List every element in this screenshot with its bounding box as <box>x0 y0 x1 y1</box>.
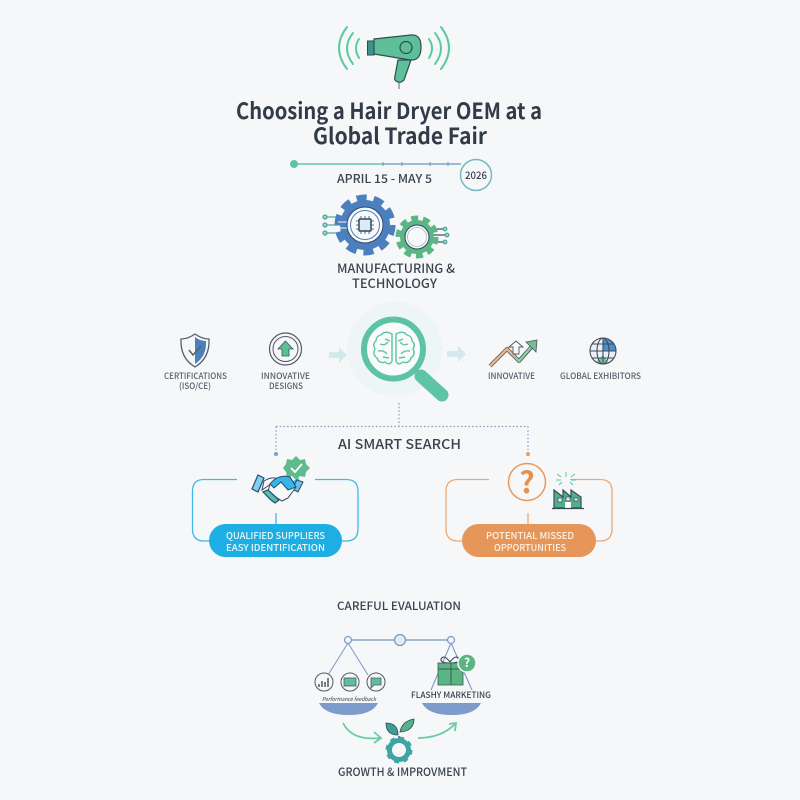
panel: qualified suppliers <box>192 456 358 557</box>
icon: question mark: ? <box>519 458 535 502</box>
arrow: left curve <box>343 723 381 743</box>
icon: globe <box>590 338 616 364</box>
icon: trend arrow <box>490 340 537 366</box>
icon: gift with question <box>438 654 476 685</box>
pill: qualified suppliers: QUALIFIED SUPPLIERS <box>226 528 325 542</box>
pill: qualified suppliers <box>209 524 342 557</box>
panel: missed opportunities <box>446 458 612 557</box>
label: innovative: INNOVATIVE <box>488 370 535 382</box>
icon: bar chart badge <box>315 673 333 691</box>
title: Global Trade Fair <box>313 119 487 151</box>
label: innovative designs: INNOVATIVE <box>261 370 310 382</box>
pill: qualified suppliers: EASY IDENTIFICATION <box>226 540 325 554</box>
dotted connector <box>274 403 530 456</box>
label: innovative designs <box>261 370 310 392</box>
timeline: APRIL 15 - MAY 5 <box>337 170 432 187</box>
heading: manufacturing and technology <box>337 258 455 292</box>
label: certifications: (ISO/CE) <box>179 380 211 392</box>
icon: AI brain magnifier <box>347 302 442 396</box>
arrow: out of search <box>447 346 466 362</box>
pill: potential missed opportunities: POTENTIAL MISSED <box>486 528 574 542</box>
heading: growth and improvement: GROWTH & IMPROVMENT <box>338 764 467 780</box>
arrow: right curve <box>418 723 456 738</box>
label: global exhibitors: GLOBAL EXHIBITORS <box>560 370 641 382</box>
icon: factory <box>552 472 584 508</box>
icon: certification shield <box>181 334 209 367</box>
icon: gears with chip <box>323 198 449 256</box>
arrow: into search <box>329 347 347 363</box>
icon: device badge <box>341 673 359 691</box>
icon: speech badge <box>367 673 385 691</box>
label: certifications <box>164 370 227 392</box>
heading: manufacturing and technology: MANUFACTURING & <box>337 258 455 277</box>
pan: left <box>319 703 378 715</box>
label: innovative designs: DESIGNS <box>269 380 303 392</box>
title: Choosing a Hair Dryer OEM at a <box>236 94 542 126</box>
heading: careful evaluation: CAREFUL EVALUATION <box>337 598 461 614</box>
icon: sprout gear <box>386 719 414 762</box>
icon: hair dryer <box>339 27 449 89</box>
icon: innovative designs arrow <box>270 333 302 365</box>
icon: question mark <box>508 458 546 502</box>
timeline <box>290 160 492 190</box>
chart: balance scale <box>315 634 491 715</box>
timeline: 2026 <box>465 167 487 182</box>
heading: manufacturing and technology: TECHNOLOGY <box>352 273 437 292</box>
label: certifications: CERTIFICATIONS <box>164 370 227 382</box>
heading: AI smart search: AI SMART SEARCH <box>338 433 461 453</box>
icon: gift with question: ? <box>464 654 470 671</box>
label: feedback caption: Performance feedback <box>322 695 377 703</box>
pan: right <box>422 703 481 715</box>
pill: potential missed opportunities: OPPORTUNITIES <box>494 540 566 554</box>
title <box>236 94 542 151</box>
icon: verified badge <box>283 456 310 480</box>
label: flashy marketing: FLASHY MARKETING <box>411 688 491 701</box>
icon: handshake <box>252 475 303 503</box>
pill: potential missed opportunities <box>462 524 596 557</box>
